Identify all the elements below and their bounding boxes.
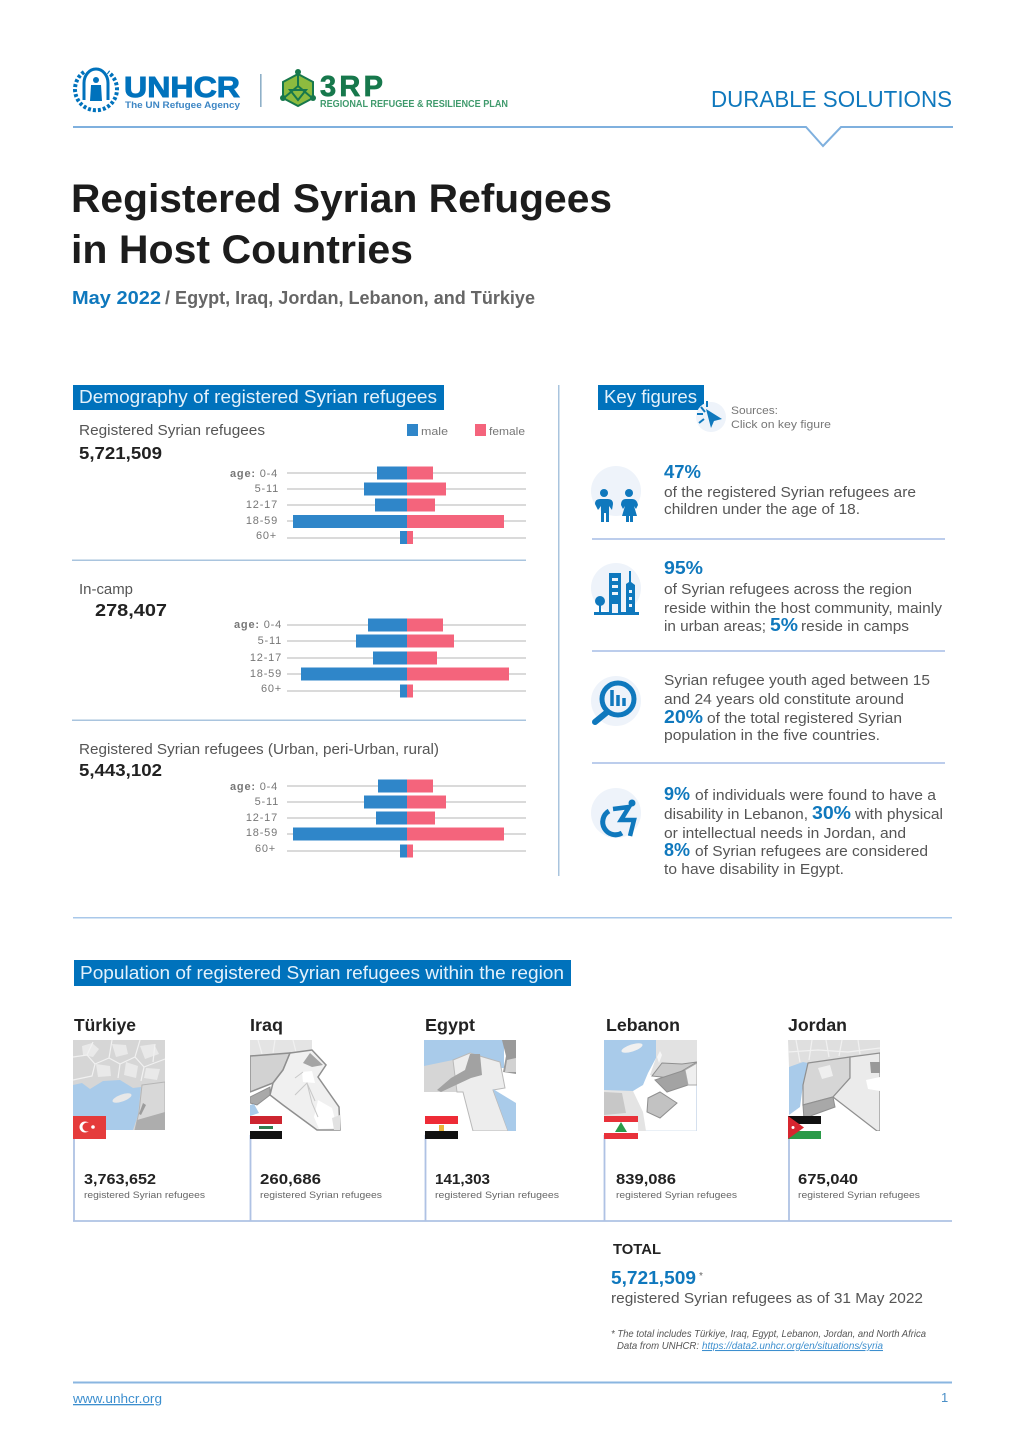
chart: in-camp: 278,407 (95, 600, 167, 620)
logo: UNHCR (75, 69, 241, 111)
figure: 95%: reside in camps (801, 619, 909, 635)
country: Türkiye: Türkiye (74, 1015, 136, 1035)
chart: registered Syrian refugees: Registered Syrian refugees (79, 423, 265, 439)
frame lines (73, 1135, 952, 1221)
chart: in-camp (79, 582, 526, 698)
figure: 95%: in urban areas; (664, 619, 766, 635)
legend: female (489, 426, 525, 438)
chart: registered Syrian refugees (79, 423, 526, 544)
logo: 3RP: REGIONAL REFUGEE & RESILIENCE PLAN (320, 99, 508, 110)
country: Egypt (424, 1015, 559, 1201)
flag: Jordan (788, 1116, 821, 1139)
chart: in-camp: 60+ (261, 683, 282, 695)
flag: Iraq (250, 1116, 282, 1139)
figure: disability: 30% (812, 803, 851, 823)
country: Jordan: 675,040 (798, 1172, 858, 1188)
country: Iraq: registered Syrian refugees (260, 1190, 382, 1201)
figure: 95%: reside within the host community, mainly (664, 601, 943, 617)
total: * (699, 1271, 703, 1282)
heading: key figures: Key figures (604, 387, 697, 407)
chart: registered Syrian refugees: 5,721,509 (79, 443, 162, 463)
chart: in-camp: 18-59 (250, 668, 282, 680)
map: Egypt (424, 1040, 516, 1131)
flag: Egypt (425, 1116, 458, 1139)
country: Jordan: registered Syrian refugees (798, 1190, 920, 1201)
icon: click (696, 401, 726, 432)
figure: disability (591, 784, 943, 878)
flag: Lebanon (604, 1116, 638, 1139)
figure: disability: with physical (854, 807, 943, 823)
icon: wheelchair (591, 788, 641, 838)
figure: disability: of individuals were found to have a (695, 788, 937, 804)
figure: 47%: children under the age of 18. (664, 502, 860, 518)
chart: registered Syrian refugees: 12-17 (246, 499, 278, 511)
country: Jordan (788, 1015, 920, 1201)
footnote: https://data2.unhcr.org/en/situations/syria (702, 1340, 883, 1352)
country: Iraq: 260,686 (260, 1172, 321, 1188)
figure: 47% (591, 462, 916, 522)
logo divider (260, 74, 262, 107)
country: Lebanon: registered Syrian refugees (616, 1190, 737, 1201)
figure: disability: 8% (664, 840, 690, 860)
logo: UNHCR: UNHCR (124, 72, 240, 104)
map: Jordan (788, 1040, 880, 1131)
figure: disability: to have disability in Egypt. (664, 862, 844, 878)
page number: 1 (941, 1390, 948, 1405)
sources note (731, 405, 831, 431)
figure: disability: or intellectual needs in Jordan, and (664, 826, 906, 842)
heading: key figures (598, 385, 704, 410)
chart: registered Syrian refugees: age: 0-4 (230, 468, 278, 480)
logo: UNHCR: The UN Refugee Agency (125, 100, 241, 111)
chart: registered Syrian refugees: 60+ (256, 530, 277, 542)
figure: disability: of Syrian refugees are considered (695, 844, 928, 860)
chart: in-camp: In-camp (79, 582, 133, 598)
footnote: * The total includes Türkiye, Iraq, Egypt, Lebanon, Jordan, and North Africa (611, 1328, 926, 1340)
chart: urban, peri-urban, rural: Registered Syrian refugees (Urban, peri-Urban, rural) (79, 742, 439, 758)
chart: urban, peri-urban, rural: 18-59 (246, 827, 278, 839)
legend: male (421, 426, 448, 438)
heading: demography: Demography of registered Syrian refugees (79, 387, 437, 407)
total: TOTAL (613, 1242, 661, 1258)
panel: demography (72, 385, 526, 858)
logo: 3RP (280, 69, 508, 110)
chart: urban, peri-urban, rural: 60+ (255, 843, 276, 855)
sources note: Sources: (731, 405, 778, 417)
chart: in-camp: 5-11 (258, 635, 282, 647)
chart: urban, peri-urban, rural: 5,443,102 (79, 760, 162, 780)
map: Iraq (250, 1040, 341, 1131)
footnote (611, 1328, 926, 1352)
country: Iraq (250, 1015, 382, 1201)
chart: urban, peri-urban, rural: age: 0-4 (230, 781, 278, 793)
total: 5,721,509 (611, 1267, 696, 1288)
figure: 95% (591, 558, 943, 635)
country: Lebanon: Lebanon (606, 1015, 680, 1035)
country: Jordan: Jordan (788, 1015, 847, 1035)
footer link: www.unhcr.org (72, 1391, 162, 1406)
figure: disability: disability in Lebanon, (664, 807, 808, 823)
section label: durable solutions: DURABLE SOLUTIONS (711, 86, 952, 112)
country: Türkiye (73, 1015, 205, 1201)
map: Türkiye (73, 1040, 165, 1130)
chart: in-camp: age: 0-4 (234, 619, 282, 631)
chart: in-camp: 12-17 (250, 652, 282, 664)
country: Lebanon (604, 1015, 737, 1201)
figure: 20%: of the total registered Syrian (707, 711, 902, 727)
figure: 47%: of the registered Syrian refugees are (664, 485, 916, 501)
heading: population: Population of registered Syrian refugees within the region (80, 963, 564, 983)
footnote: Data from UNHCR: (617, 1340, 699, 1352)
figure: 20%: Syrian refugee youth aged between 15 (664, 673, 930, 689)
country: Türkiye: registered Syrian refugees (84, 1190, 205, 1201)
figure: 95%: 5% (770, 615, 798, 635)
chart: registered Syrian refugees: 18-59 (246, 515, 278, 527)
country: Iraq: Iraq (250, 1015, 283, 1035)
map: Lebanon (604, 1040, 697, 1131)
chart: registered Syrian refugees: 5-11 (255, 483, 279, 495)
panel: key figures (591, 385, 945, 878)
title: in Host Countries (71, 228, 413, 272)
header rule with notch (73, 127, 953, 146)
figure: 20%: 20% (664, 707, 703, 727)
country: Egypt: 141,303 (435, 1172, 490, 1188)
chart: urban, peri-urban, rural (79, 742, 526, 858)
icon: magnifier chart (591, 676, 641, 726)
figure: 95%: of Syrian refugees across the region (664, 582, 912, 598)
total: registered Syrian refugees as of 31 May 2022 (611, 1290, 923, 1307)
subtitle: / Egypt, Iraq, Jordan, Lebanon, and Türkiye (165, 288, 535, 308)
icon: city (591, 563, 641, 615)
figure: 20%: population in the five countries. (664, 728, 880, 744)
title (71, 177, 612, 272)
sources note: Click on key figure (731, 419, 831, 431)
chart: urban, peri-urban, rural: 5-11 (255, 796, 279, 808)
figure: 95%: 95% (664, 558, 703, 578)
subtitle: May 2022 (72, 288, 161, 308)
figure: disability: 9% (664, 784, 690, 804)
icon: children (591, 466, 641, 522)
figure: 47%: 47% (664, 462, 701, 482)
country: Türkiye: 3,763,652 (84, 1172, 156, 1188)
logo: 3RP: 3RP (320, 71, 383, 103)
total (611, 1242, 923, 1307)
title: Registered Syrian Refugees (71, 177, 612, 221)
flag: Türkiye (73, 1116, 106, 1139)
legend (407, 424, 525, 438)
country: Lebanon: 839,086 (616, 1172, 676, 1188)
country: Egypt: registered Syrian refugees (435, 1190, 559, 1201)
chart: urban, peri-urban, rural: 12-17 (246, 812, 278, 824)
figure: 20% (591, 673, 930, 744)
country: Egypt: Egypt (425, 1015, 475, 1035)
panel: population by country (73, 960, 952, 1221)
figure: 20%: and 24 years old constitute around (664, 692, 904, 708)
